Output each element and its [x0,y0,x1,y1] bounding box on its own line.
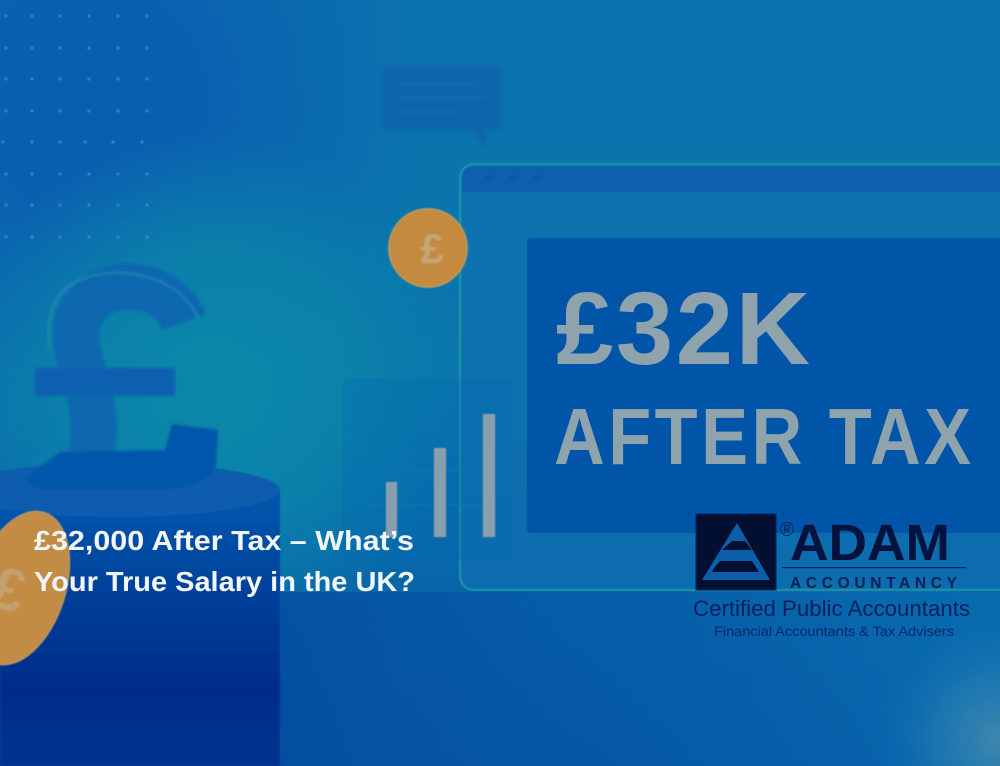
logo subtitle: ACCOUNTANCY [790,575,958,592]
bar 2 [434,448,446,537]
dot grid pattern [1,14,149,239]
title: £32,000 After Tax – What’s [34,525,414,556]
window dots [485,174,541,182]
inner dark panel [527,238,1000,533]
icon: gold coin top [389,209,467,287]
heading: £32K: £32K [556,271,810,386]
registered mark: ® [780,520,794,541]
title: Your True Salary in the UK? [34,566,415,597]
logo descriptor: Financial Accountants & Tax Advisers [714,623,954,639]
panel: browser window [460,164,1000,590]
icon: large pound sign [26,273,218,490]
icon: gold coin top: £ [420,225,444,272]
icon: gold coin left [0,499,87,677]
bar 3 [483,414,495,537]
icon: speech bubble [382,66,502,146]
logo: Adam Accountancy [693,514,970,639]
logo mark [696,514,776,590]
logo tagline: Certified Public Accountants [693,596,970,621]
chart panel with bars [343,380,511,560]
bar 1 [386,482,397,537]
cylinder pedestal [0,463,280,766]
logo name: ADAM [790,514,950,571]
window title bar [462,166,1000,192]
heading: AFTER TAX: AFTER TAX [554,392,971,481]
